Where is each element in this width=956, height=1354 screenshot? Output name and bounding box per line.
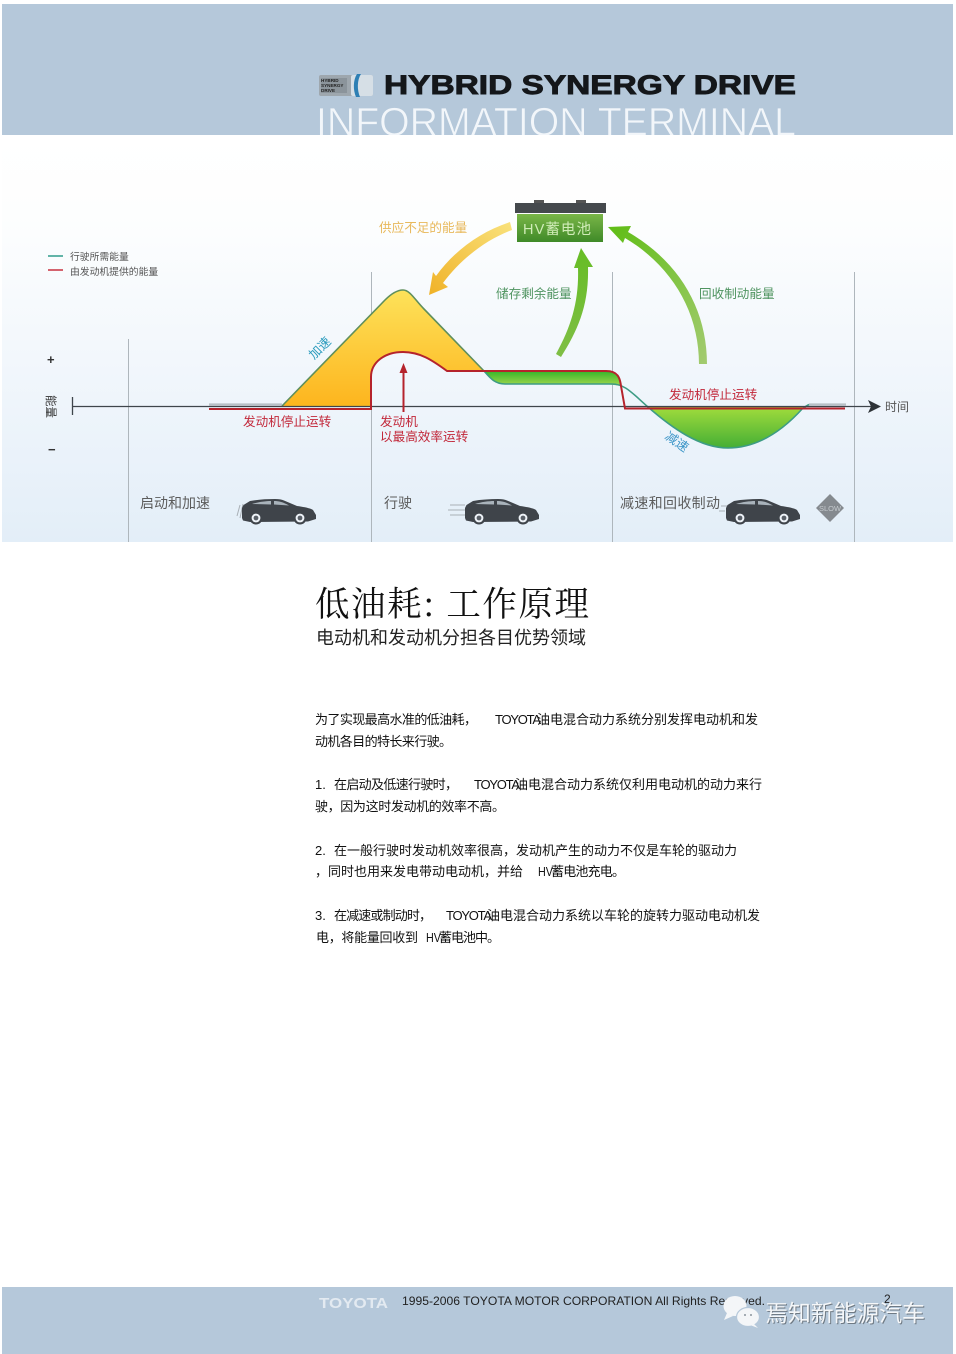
curve: engine energy — [209, 352, 845, 409]
area: green surplus — [484, 371, 621, 386]
title: 低油耗: 工作原理 — [315, 576, 589, 626]
watermark text: 焉知新能源汽车 — [765, 1300, 925, 1326]
arrow: store surplus — [556, 248, 593, 357]
text block: intro and steps: 动机各目的特长来行驶。 — [315, 734, 452, 749]
icon: battery: HV蓄电池 — [523, 221, 591, 238]
icon: hybrid synergy drive logo: DRIVE — [321, 88, 335, 93]
y axis labels — [44, 352, 58, 457]
text block: intro and steps: 1. — [315, 777, 326, 792]
icon: hybrid synergy drive logo: HYBRID — [321, 78, 339, 83]
text block: intro and steps: 电，将能量回收到 — [316, 930, 418, 945]
text block: intro and steps: 油电混合动力系统仅利用电动机的动力来行 — [515, 777, 762, 792]
footer: toyota brand: TOYOTA — [319, 1295, 388, 1312]
icon: hybrid synergy drive logo — [319, 74, 373, 97]
heading: hybrid synergy drive: HYBRID SYNERGY DRIVE — [384, 70, 796, 100]
legend: 行驶所需能量 — [70, 250, 129, 263]
text block: intro and steps: TOYOTA — [474, 777, 520, 792]
text block: intro and steps: 油电混合动力系统分别发挥电动机和发 — [537, 712, 758, 727]
x axis with arrow: 时间 — [885, 400, 909, 414]
text block: intro and steps: 在启动及低速行驶时， — [334, 777, 458, 792]
x axis with arrow — [72, 397, 909, 415]
text block: intro and steps: 2. — [315, 843, 326, 858]
panel: energy diagram — [2, 135, 953, 542]
labels: 以最高效率运转 — [380, 429, 469, 444]
phase 1: start and accelerate: 启动和加速 — [140, 495, 210, 511]
text block: intro and steps: 蓄电池充电。 — [551, 864, 625, 879]
icon: wechat bubbles — [724, 1296, 760, 1328]
text block: intro and steps: HV — [426, 930, 441, 945]
arrow: recover braking — [608, 226, 707, 364]
footer band — [2, 1287, 953, 1354]
icon: battery — [515, 200, 606, 242]
icon: slow sign: SLOW — [819, 504, 842, 513]
labels: 减速 — [662, 429, 691, 455]
footer: page number: 2 — [884, 1292, 891, 1306]
labels: 发动机 — [380, 414, 418, 429]
text block: intro and steps: 油电混合动力系统以车轮的旋转力驱动电动机发 — [487, 908, 760, 923]
y axis labels: + — [47, 352, 55, 367]
labels: 发动机停止运转 — [669, 387, 758, 402]
legend: 由发动机提供的能量 — [70, 265, 158, 278]
labels: 供应不足的能量 — [379, 220, 468, 235]
arrow: engine up — [400, 363, 408, 412]
text block: intro and steps: 在一般行驶时发动机效率很高，发动机产生的动力不仅是车轮的驱动力 — [334, 843, 737, 858]
labels: 发动机停止运转 — [243, 414, 332, 429]
phase 2: cruising: 行驶 — [384, 495, 412, 511]
text block: intro and steps: 蓄电池中。 — [439, 930, 500, 945]
text block: intro and steps: 3. — [315, 908, 326, 923]
phase 3: decelerate and recover: 减速和回收制动 — [620, 495, 720, 511]
area: yellow shortage — [282, 290, 484, 406]
text block: intro and steps: TOYOTA — [495, 712, 541, 727]
y axis labels: 能量 — [44, 395, 58, 418]
text block: intro and steps: 在减速或制动时， — [334, 908, 432, 923]
heading: information terminal: INFORMATION TERMINAL — [316, 100, 796, 144]
area: green regeneration — [648, 407, 803, 448]
icon: hybrid synergy drive logo: SYNERGY — [321, 83, 343, 88]
text block: intro and steps: HV — [538, 864, 553, 879]
labels: 储存剩余能量 — [496, 286, 572, 301]
y axis labels: − — [48, 442, 56, 457]
phase 1: start and accelerate — [140, 495, 316, 524]
curve: required energy — [209, 290, 846, 448]
header band — [2, 4, 953, 144]
legend — [48, 250, 158, 278]
text block: intro and steps: 驶，因为这时发动机的效率不高。 — [315, 799, 505, 814]
text block: intro and steps: ，同时也用来发电带动电动机，并给 — [315, 864, 523, 879]
labels: 加速 — [306, 334, 334, 362]
labels: 回收制动能量 — [699, 287, 775, 301]
text block: intro and steps: 为了实现最高水准的低油耗， — [315, 712, 477, 727]
footer: copyright: 1995-2006 TOYOTA MOTOR CORPORATION All Rights Reserved. — [402, 1294, 765, 1308]
phase 2: cruising — [384, 495, 539, 524]
icon: slow sign — [816, 494, 844, 522]
phase 3: decelerate and recover — [620, 495, 800, 524]
subtitle: 电动机和发动机分担各目优势领域 — [316, 628, 586, 648]
arrow: shortage energy — [429, 222, 512, 295]
text block: intro and steps — [315, 712, 762, 945]
labels — [243, 220, 775, 455]
text block: intro and steps: TOYOTA — [446, 908, 492, 923]
watermark text: 焉知新能源汽车 — [766, 1301, 926, 1327]
